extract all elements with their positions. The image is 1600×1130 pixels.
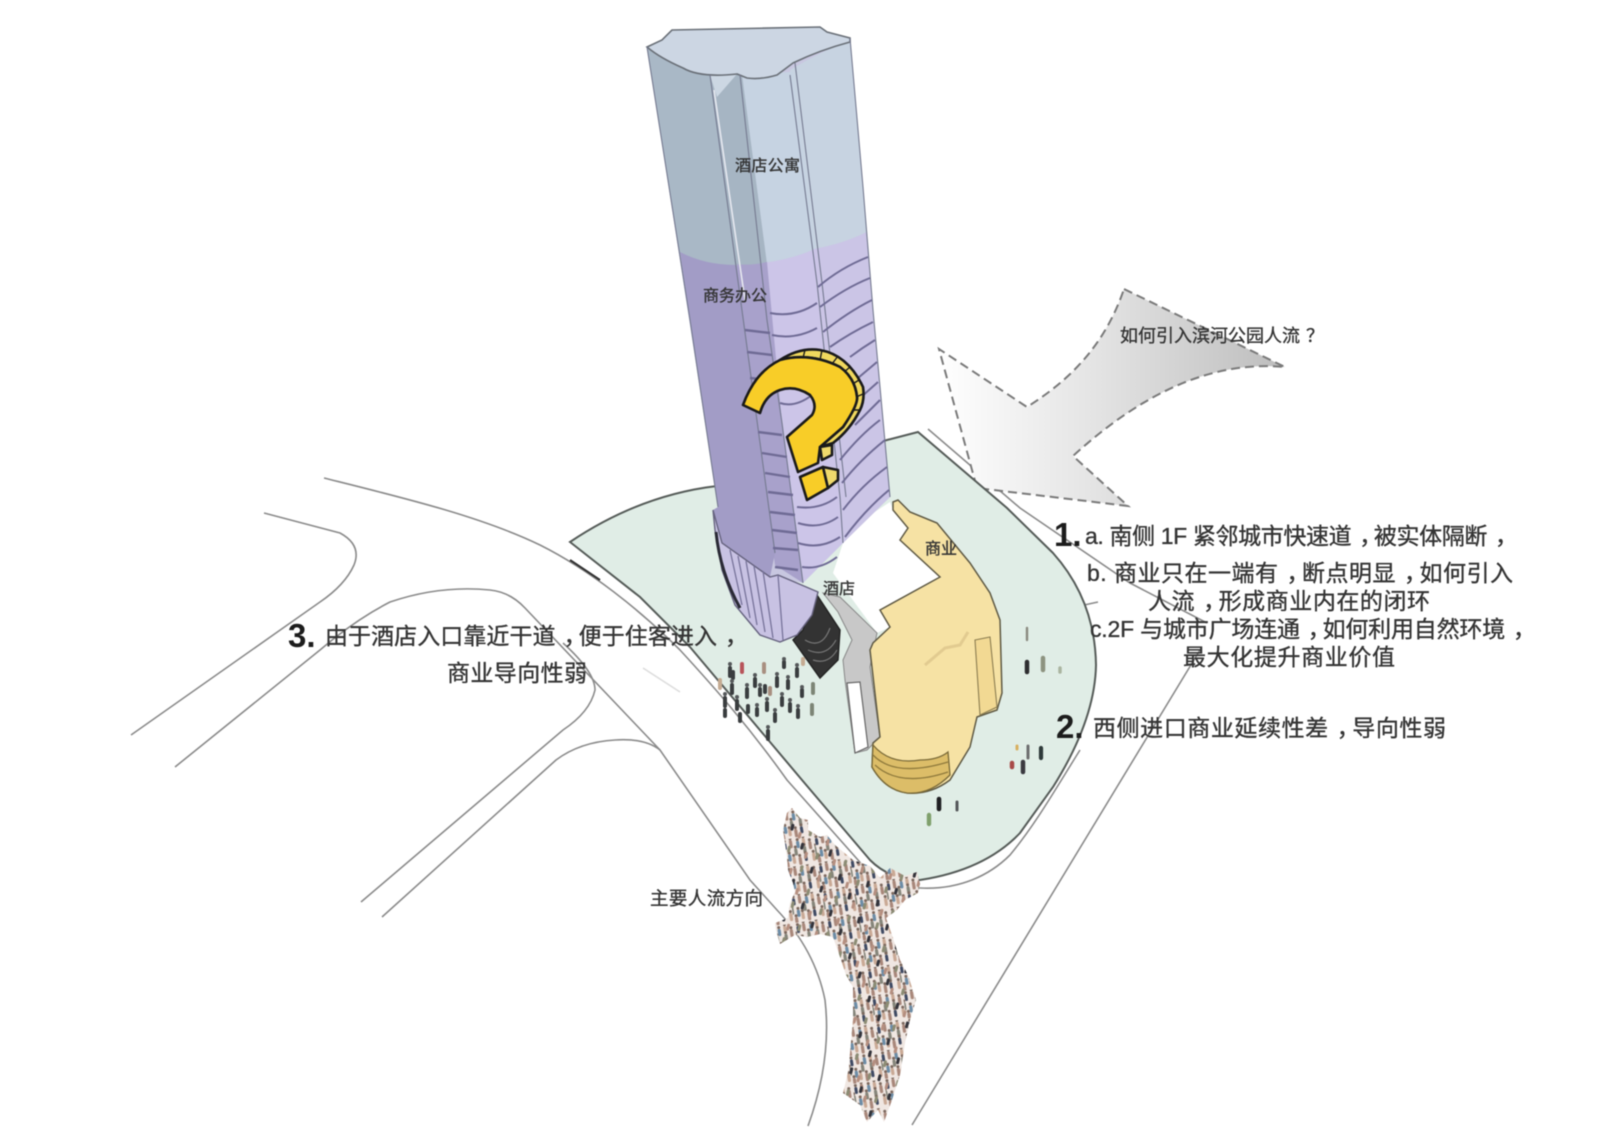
floor lines centre face: [770, 303, 840, 568]
roof: [647, 27, 850, 79]
hotel base: [713, 510, 818, 642]
label: retail: 商业: [925, 540, 957, 558]
centre face apartments: [735, 72, 815, 263]
note 1c first line: c.2F 与城市广场连通 ，如何利用自然环境 ，: [1090, 616, 1536, 642]
note 1a: a. 南侧 1F 紧邻城市快速道 ，被实体隔断 ，: [1085, 523, 1518, 549]
centre face offices: [762, 249, 843, 583]
retail roof: [870, 500, 1002, 793]
retail side wing: [975, 637, 997, 715]
right face offices: [813, 232, 890, 543]
note 1c second line: 最大化提升商业价值: [1183, 644, 1395, 670]
people at hotel entrance: [720, 659, 813, 739]
note 1 number: 1.: [1054, 516, 1082, 553]
recessed band offices: [734, 262, 803, 583]
structural lines: [647, 38, 890, 583]
label: business offices: 商务办公: [703, 287, 767, 305]
extrusion segments: [803, 350, 863, 410]
recessed band light facet: [710, 74, 737, 97]
front glyph: [743, 357, 857, 472]
commercial podium: [823, 500, 1002, 793]
right face apartments: [790, 40, 867, 249]
roof mark: [925, 632, 968, 665]
label: main flow direction: 主要人流方向: [650, 888, 763, 909]
label: hotel apartments: 酒店公寓: [735, 157, 800, 175]
courtyard: [833, 502, 940, 633]
note 3 number: 3.: [288, 617, 316, 654]
note 2: [1056, 708, 1446, 745]
crowd base tone: [770, 805, 925, 1125]
dot side: [823, 467, 838, 488]
label: hotel: 酒店: [823, 580, 855, 598]
note 3: [288, 617, 748, 686]
question mark: [743, 349, 864, 500]
note 1b first line: b. 商业只在一端有 ，断点明显 ，如何引入: [1087, 560, 1513, 586]
silhouette underlay: [647, 38, 890, 583]
stem cube: [820, 445, 832, 460]
note 3 first line: 由于酒店入口靠近干道 ，便于住客进入 ，: [325, 623, 748, 649]
base stripes: [730, 550, 783, 640]
arrow: riverside park flow: [939, 289, 1324, 506]
dot: [800, 467, 828, 500]
floor lines recessed band: [745, 330, 798, 570]
recessed band apartments: [710, 72, 767, 266]
people on east plaza: [929, 628, 1060, 824]
white strip: [714, 90, 745, 300]
hotel stairs: [793, 592, 840, 678]
crowd figures: [770, 805, 925, 1125]
green plaza: [570, 432, 1096, 880]
note 2 number: 2.: [1056, 708, 1084, 745]
crowd second layer figures: [781, 811, 920, 1118]
tower: [647, 27, 890, 642]
note 2 text: 西侧进口商业延续性差 ，导向性弱: [1093, 715, 1446, 741]
white annex: [847, 682, 868, 753]
note 1: [1054, 516, 1536, 670]
road lines: [131, 429, 1207, 1126]
step lines: [873, 755, 948, 779]
arrow label: 如何引入滨河公园人流 ？: [1120, 326, 1324, 346]
rotunda steps: [872, 745, 950, 793]
extrusion: [780, 349, 864, 447]
left face apartments: [647, 47, 737, 266]
base shadow: [716, 532, 740, 608]
entry grey area: [823, 593, 880, 753]
left face offices: [680, 252, 775, 577]
floor lines right face: [818, 257, 889, 537]
note 3 second line: 商业导向性弱: [447, 660, 587, 686]
main pedestrian flow crowd: [770, 805, 925, 1125]
note 1b second line: 人流 ，形成商业内在的闭环: [1148, 588, 1430, 614]
